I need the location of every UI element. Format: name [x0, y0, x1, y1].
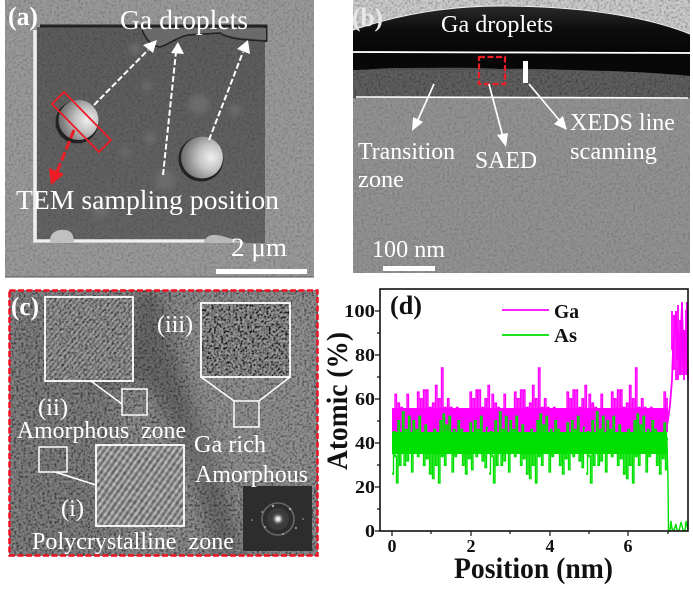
droplet 2	[178, 136, 224, 182]
text: scale 2 um: 2 μm	[231, 232, 287, 262]
heading: panel a label: (a)	[8, 2, 38, 31]
inset: SAED pattern	[243, 486, 312, 551]
x axis labels: 2	[466, 536, 476, 556]
XEDS line marker	[523, 61, 528, 83]
x axis title: Position (nm)	[454, 552, 613, 585]
y axis labels	[344, 301, 375, 541]
text: Polycrystalline zone: Polycrystalline zone	[32, 529, 234, 555]
text: Amorphous zone: Amorphous zone	[17, 418, 186, 444]
panel a: SEM image	[5, 0, 314, 277]
text: Transition zone: Transition	[358, 139, 455, 165]
axes	[380, 289, 688, 531]
text: XEDS line scanning: XEDS line	[570, 110, 675, 136]
text: Ga droplets (b): Ga droplets	[441, 12, 553, 38]
text: XEDS line scanning	[570, 110, 675, 165]
chart: panel d line chart	[321, 289, 688, 585]
text: Ga rich Amorphous: Ga rich	[194, 432, 266, 458]
text: Transition zone: zone	[358, 167, 404, 193]
text: TEM sampling position: TEM sampling position	[16, 184, 279, 215]
arrow: droplet 2 to label	[209, 40, 250, 140]
heading: panel c label: (c)	[11, 292, 39, 321]
text: Transition zone	[358, 139, 455, 193]
label: i: (i)	[61, 496, 84, 522]
inset: polycrystalline zone (i)	[39, 445, 184, 526]
text: SAED: SAED	[475, 148, 537, 174]
series: Ga	[392, 302, 688, 432]
y axis labels: 0	[365, 521, 375, 541]
heading: panel b label: (b)	[352, 3, 383, 32]
arrow: small droplet to label	[163, 42, 184, 175]
y axis labels: 100	[344, 301, 375, 321]
scale bar b	[383, 266, 435, 271]
droplet 1	[56, 100, 98, 144]
text: Ga rich Amorphous: Amorphous	[195, 462, 308, 488]
legend	[502, 301, 579, 347]
arrow: SAED	[489, 84, 508, 147]
SAED region box	[479, 57, 505, 84]
y axis title: Atomic (%)	[321, 332, 354, 470]
inset: Ga rich amorphous (iii)	[201, 303, 290, 427]
legend: Ga	[554, 301, 579, 323]
arrow: TEM sampling	[49, 130, 74, 185]
legend: As	[554, 325, 577, 347]
text: Ga rich Amorphous	[194, 432, 308, 488]
x axis labels: 0	[388, 536, 396, 556]
label: iii: (iii)	[157, 312, 193, 338]
scale bar a	[216, 269, 307, 274]
y axis labels: 20	[355, 477, 375, 497]
panel b: TEM image	[353, 0, 690, 273]
inset: amorphous zone (ii)	[45, 297, 147, 415]
text: Ga droplets (a): Ga droplets	[120, 4, 248, 35]
label: ii: (ii)	[38, 395, 68, 421]
arrow: transition zone	[412, 84, 434, 131]
TEM sampling box	[52, 92, 111, 152]
y axis labels: 60	[355, 389, 375, 409]
x axis labels: 6	[624, 536, 632, 556]
arrow: XEDS	[529, 84, 567, 130]
text: XEDS line scanning: scanning	[570, 139, 657, 165]
x axis labels	[388, 536, 632, 556]
y axis labels: 40	[355, 433, 375, 453]
arrow: droplet 1 to label	[94, 40, 157, 105]
tick marks	[375, 311, 668, 536]
text: 100 nm: 100 nm	[372, 237, 445, 263]
x axis labels: 4	[546, 536, 554, 556]
y axis labels: 80	[355, 345, 375, 365]
series: As	[392, 412, 688, 531]
panel c: HRTEM image	[9, 290, 318, 556]
heading: panel d label: (d)	[390, 291, 422, 320]
